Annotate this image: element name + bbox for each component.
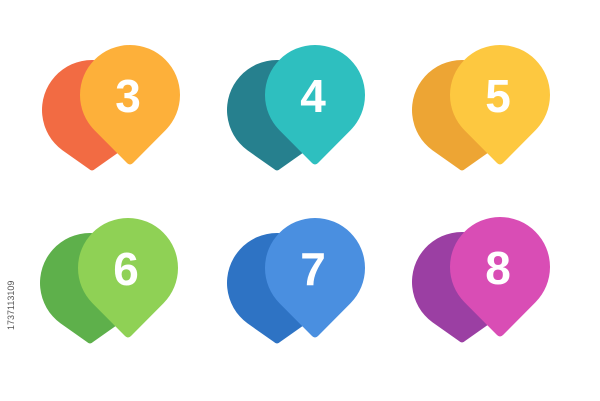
pin 7: 7 [300,243,326,295]
pin 3: 3 [115,70,141,122]
pin 4 [227,45,365,171]
pin 3 [42,45,180,171]
pin 6 [40,218,178,344]
pin 8 [412,217,550,342]
pin 4: 4 [300,70,326,122]
pin 5: 5 [485,70,511,122]
pin 6: 6 [113,243,139,295]
side id text: 1737113109 [6,281,16,330]
pin 7 [227,218,365,344]
pin 8: 8 [485,242,511,294]
pin 5 [412,45,550,171]
